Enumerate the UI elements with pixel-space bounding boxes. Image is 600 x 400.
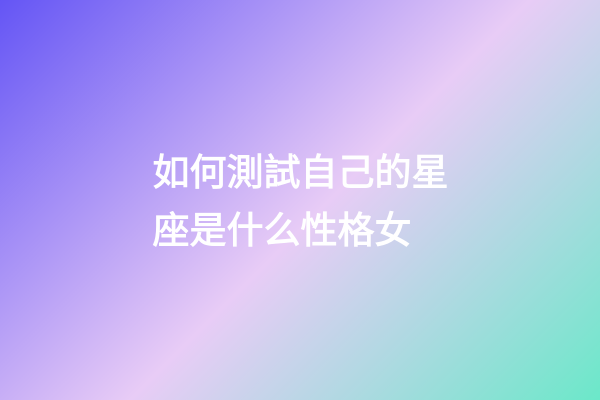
title line 1: 如何測試自己的星 — [152, 152, 448, 193]
title line 2: 座是什么性格女 — [152, 210, 412, 251]
title — [152, 152, 448, 251]
